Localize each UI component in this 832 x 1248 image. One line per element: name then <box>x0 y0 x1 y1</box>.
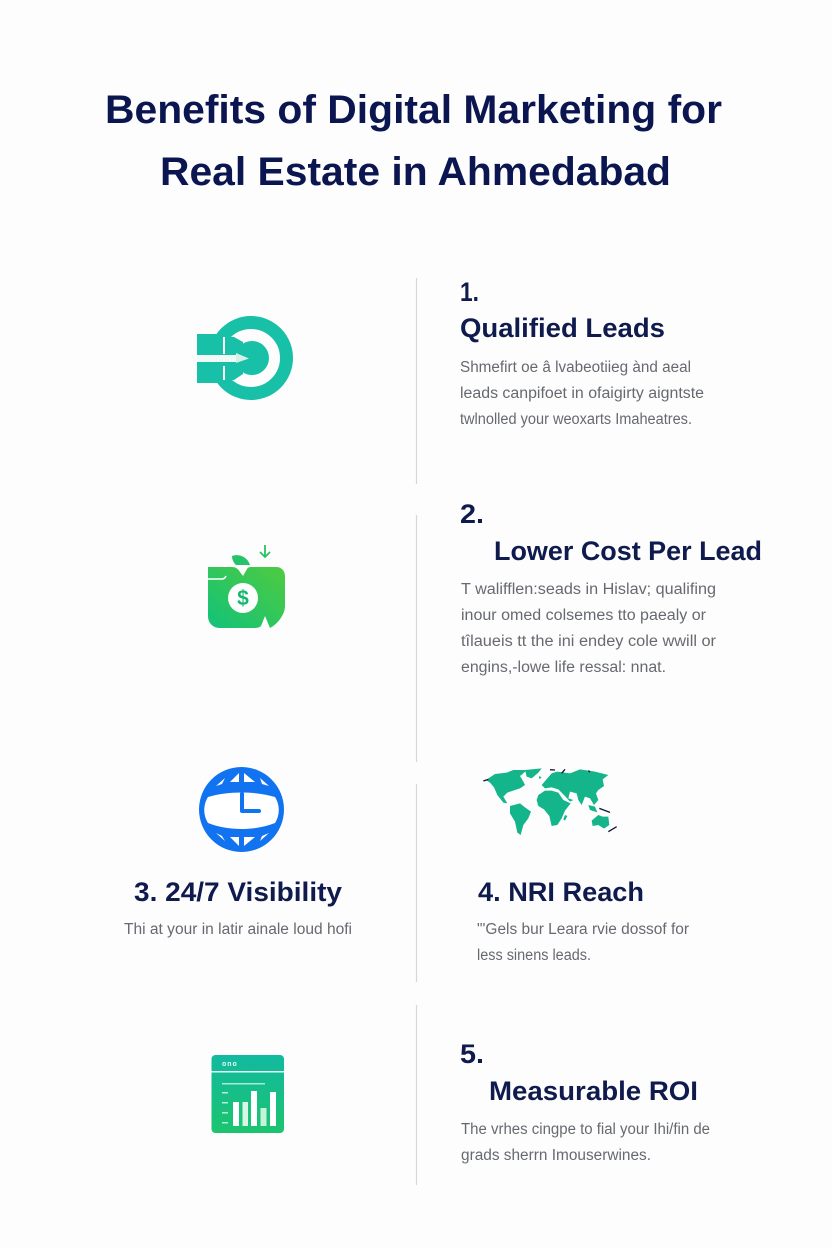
title: Benefits of Digital Marketing for <box>105 88 722 132</box>
text block: nri reach <box>477 921 689 964</box>
text block: lower cost per lead: tîlaueis tt the ini endey cole wwill or <box>461 633 716 650</box>
number 5: 5. <box>460 1039 484 1069</box>
panel: lower cost per lead <box>208 499 762 676</box>
heading: nri reach: 4. NRI Reach <box>478 877 644 907</box>
number 2: 2. <box>460 499 484 529</box>
text block: lower cost per lead <box>461 581 716 676</box>
text block: lower cost per lead: T walifflen:seads in Hislav; qualifing <box>461 581 716 598</box>
text block: lower cost per lead: inour omed colsemes tto paealy or <box>461 607 706 624</box>
panel: nri reach <box>477 768 689 964</box>
heading: 24/7 visibility: 3. 24/7 Visibility <box>134 877 342 907</box>
heading: lower cost per lead: Lower Cost Per Lead <box>494 536 762 566</box>
heading: measurable roi: Measurable ROI <box>489 1076 698 1106</box>
text block: nri reach: less sinens leads. <box>477 947 591 964</box>
text block: measurable roi: grads sherrn Imouserwines. <box>461 1147 651 1164</box>
number 1: 1. <box>460 277 479 307</box>
center divider line <box>416 278 418 1185</box>
text block: qualified leads: twlnolled your weoxarts Imaheatres. <box>460 411 692 428</box>
panel: qualified leads <box>197 277 704 428</box>
icon: globe clock <box>199 767 284 852</box>
title: Real Estate in Ahmedabad <box>160 150 671 194</box>
text block: measurable roi: The vrhes cingpe to fial your Ihi/fin de <box>461 1121 710 1138</box>
text block: qualified leads <box>460 359 704 428</box>
text block: qualified leads: leads canpifoet in ofaigirty aigntste <box>460 385 704 402</box>
text block: lower cost per lead: engins,-lowe life ressal: nnat. <box>461 659 666 676</box>
text block: 24/7 visibility: Thi at your in latir ainale loud hofi <box>124 921 352 938</box>
icon: money wallet <box>208 545 285 628</box>
heading: qualified leads: Qualified Leads <box>460 313 665 343</box>
icon: money wallet: $ <box>237 587 249 610</box>
text block: qualified leads: Shmefirt oe â lvabeotiieg ànd aeal <box>460 359 691 376</box>
icon: analytics dashboard: ono <box>222 1061 238 1068</box>
title <box>105 88 722 194</box>
icon: analytics dashboard <box>212 1055 284 1133</box>
text block: nri reach: "'Gels bur Leara rvie dossof for <box>477 921 689 938</box>
panel: 24/7 visibility <box>124 767 352 938</box>
panel: measurable roi <box>212 1039 710 1164</box>
icon: world map <box>483 768 617 835</box>
icon: target <box>197 322 286 394</box>
text block: measurable roi <box>461 1121 710 1164</box>
